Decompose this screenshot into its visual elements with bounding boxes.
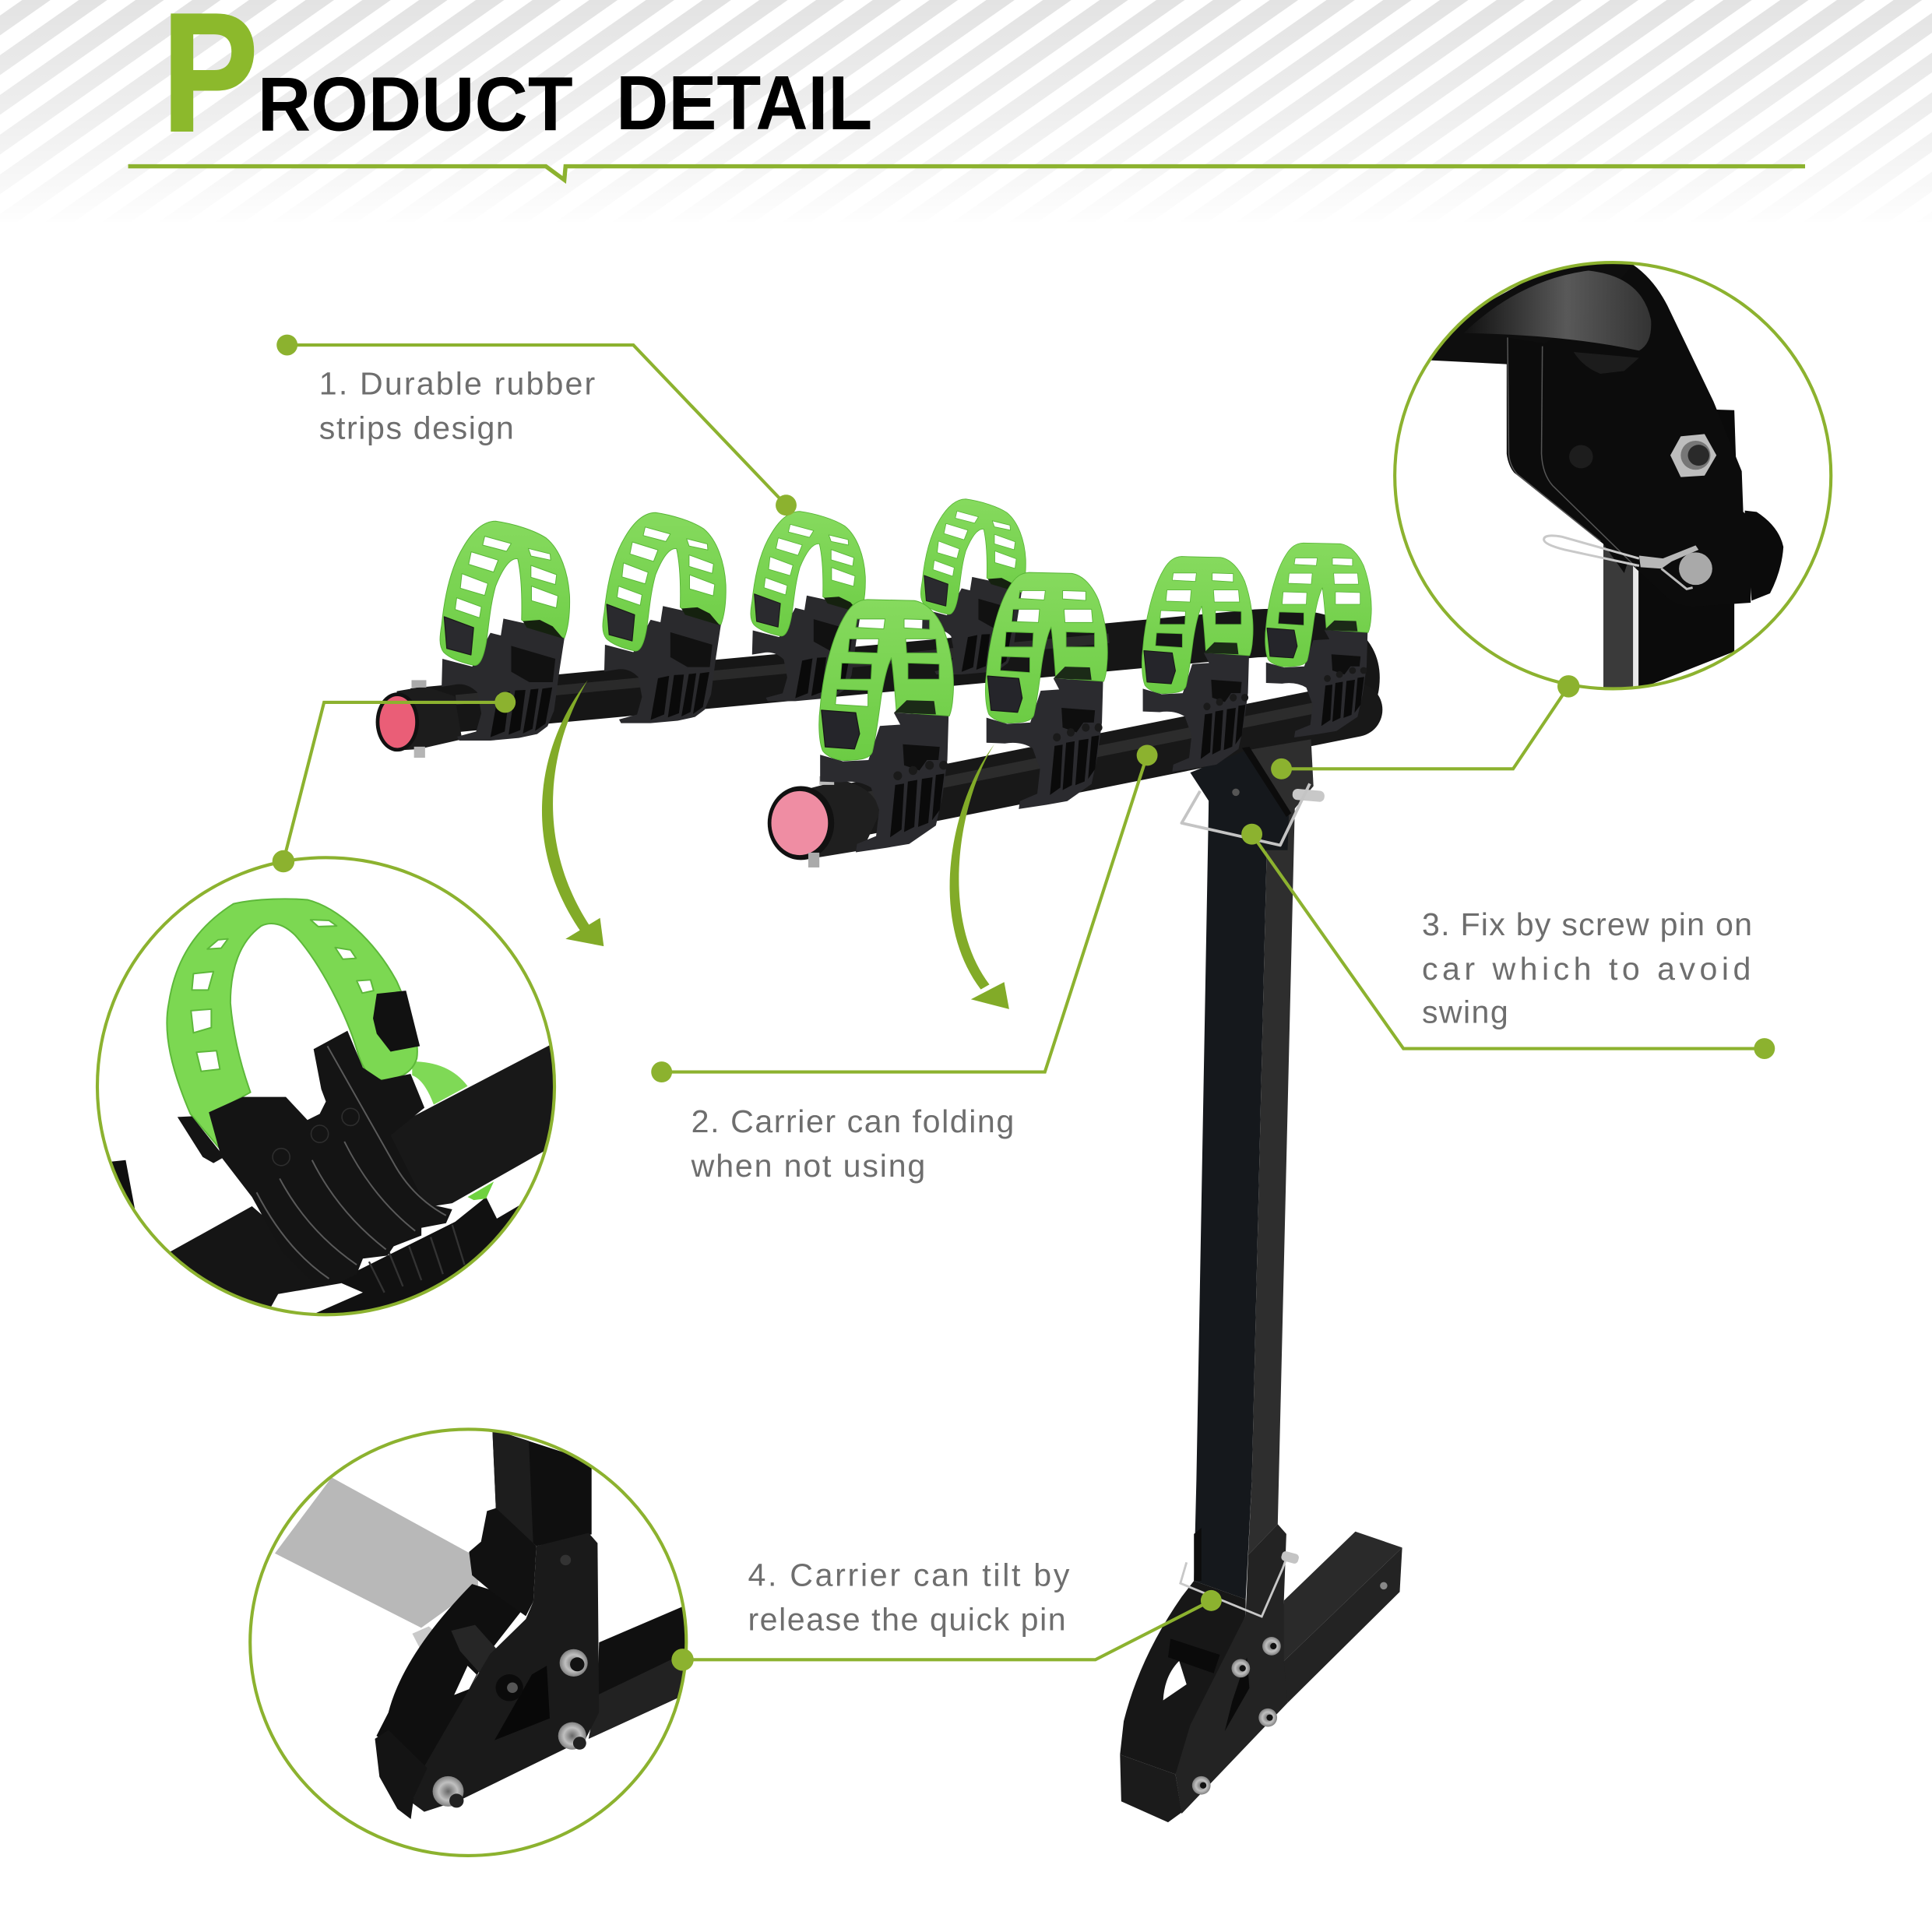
product: bike carrier [376,499,1402,1822]
header background stripes [0,0,1932,223]
text: feature 2 [691,1103,1014,1184]
detail circle: tilt pin [250,1429,693,1856]
front tube [838,702,1355,813]
text: feature 3 [1422,906,1752,1029]
back row rubber strip clamps [440,499,1026,741]
detail circle: rubber strip [97,857,557,1323]
base bracket [1120,1524,1300,1822]
stand post [1194,801,1295,1599]
text: feature 2: when not using [691,1148,925,1184]
front end cap with reflector [768,776,880,867]
callout 3 line and dots [1241,824,1775,1059]
hitch receiver tube [1282,1532,1402,1703]
callout to screw pin circle [1271,675,1579,779]
text: feature 1: strips design [319,410,514,445]
front row rubber strip clamps [819,543,1371,852]
arrow: front bar folding [950,744,1009,1009]
text: feature 4: 4. Carrier can tilt by [748,1557,1070,1592]
text: feature 1: 1. Durable rubber [319,365,596,401]
callout to rubber strip circle [273,692,516,872]
title: RODUCT [258,62,573,147]
title: DETAIL [616,60,872,146]
text: feature 4 [748,1557,1070,1637]
title [162,0,872,167]
tubes back [413,633,1356,717]
callout 2 line and dots [651,744,1158,1082]
callout 4 line and dots [671,1590,1222,1671]
callout 1 line and dots [276,335,797,516]
detail circle: screw pin [1395,262,1831,692]
text: feature 4: release the quick pin [748,1601,1066,1637]
stand top bracket [1181,739,1325,850]
title underline with notch [128,167,1805,180]
text: feature 3: swing [1422,994,1508,1029]
text: feature 1 [319,365,596,445]
text: feature 3: car which to avoid [1422,951,1751,987]
end cap back with reflector [376,680,462,758]
text: feature 2: 2. Carrier can folding [692,1103,1014,1139]
arrow: back bar folding [542,680,604,946]
text: feature 3: 3. Fix by screw pin on [1422,906,1752,942]
